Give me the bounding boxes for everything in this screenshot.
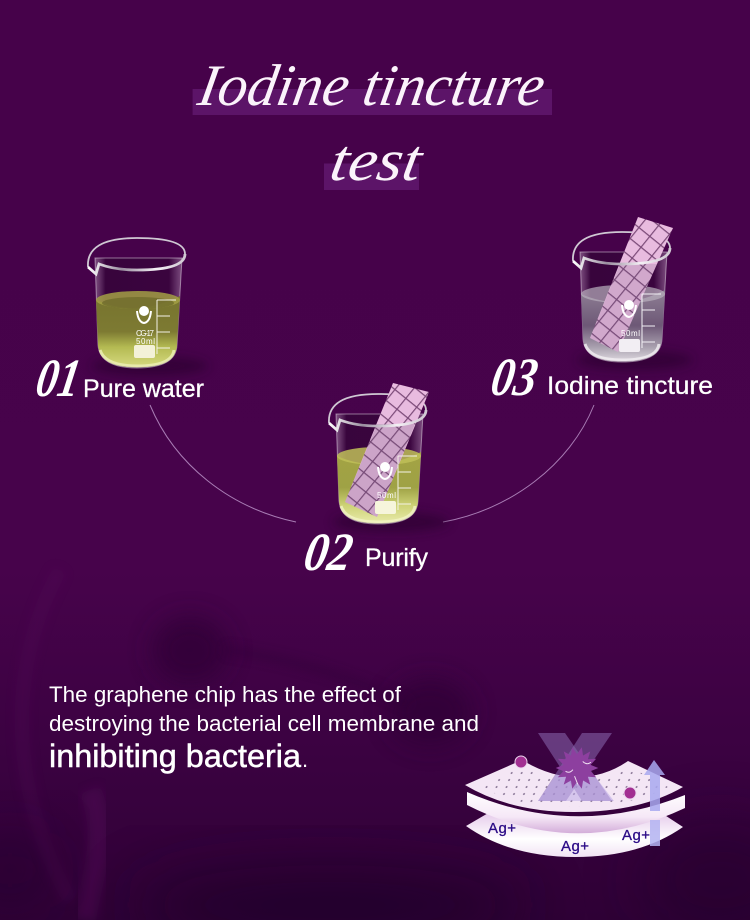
description text: . [302, 747, 308, 772]
connector arc: step 1 to step 2 [150, 405, 296, 522]
step 2: beaker [329, 383, 449, 532]
step 1: beaker [88, 238, 208, 376]
description text: destroying the bacterial cell membrane and [49, 711, 479, 736]
bacterium [556, 747, 598, 789]
title line two: test [326, 127, 429, 193]
step 3: label [487, 347, 713, 407]
title line one: Iodine tincture [193, 52, 550, 118]
title highlight bar: first line [193, 89, 552, 115]
caption: Pure water [83, 375, 204, 403]
step 1: beaker: CG-17 [136, 329, 155, 338]
particle right [624, 787, 636, 799]
ion label left: Ag+ [488, 820, 516, 837]
number 03: 03 [487, 347, 542, 407]
chip illustration [465, 733, 685, 857]
description text [49, 682, 479, 774]
step 3: beaker [573, 217, 693, 370]
step 2: label [300, 522, 428, 582]
ion label center: Ag+ [561, 838, 589, 855]
step 3: beaker: 50ml [621, 329, 640, 338]
caption: Iodine tincture [547, 372, 713, 400]
middle band [467, 792, 685, 833]
description text: inhibiting bacteria [49, 738, 301, 774]
description text: The graphene chip has the effect of [49, 682, 402, 707]
particle left [515, 756, 527, 768]
top sheet [465, 760, 683, 812]
ion label right: Ag+ [622, 827, 650, 844]
step 2: beaker: 50ml [377, 491, 396, 500]
blocking X [538, 733, 614, 801]
perforation dots [480, 765, 668, 807]
number 01: 01 [32, 348, 85, 408]
connector arc: step 3 to step 2 [443, 405, 594, 522]
bottom sheet [466, 812, 683, 857]
upward arrow [644, 760, 665, 846]
test strip [590, 217, 673, 352]
title [193, 52, 552, 193]
step 1: beaker: 50ml [136, 337, 155, 346]
caption: Purify [365, 544, 428, 572]
title highlight bar: second line [324, 164, 419, 190]
test strip [345, 383, 429, 517]
step 1: label [32, 348, 204, 408]
number 02: 02 [300, 522, 357, 582]
